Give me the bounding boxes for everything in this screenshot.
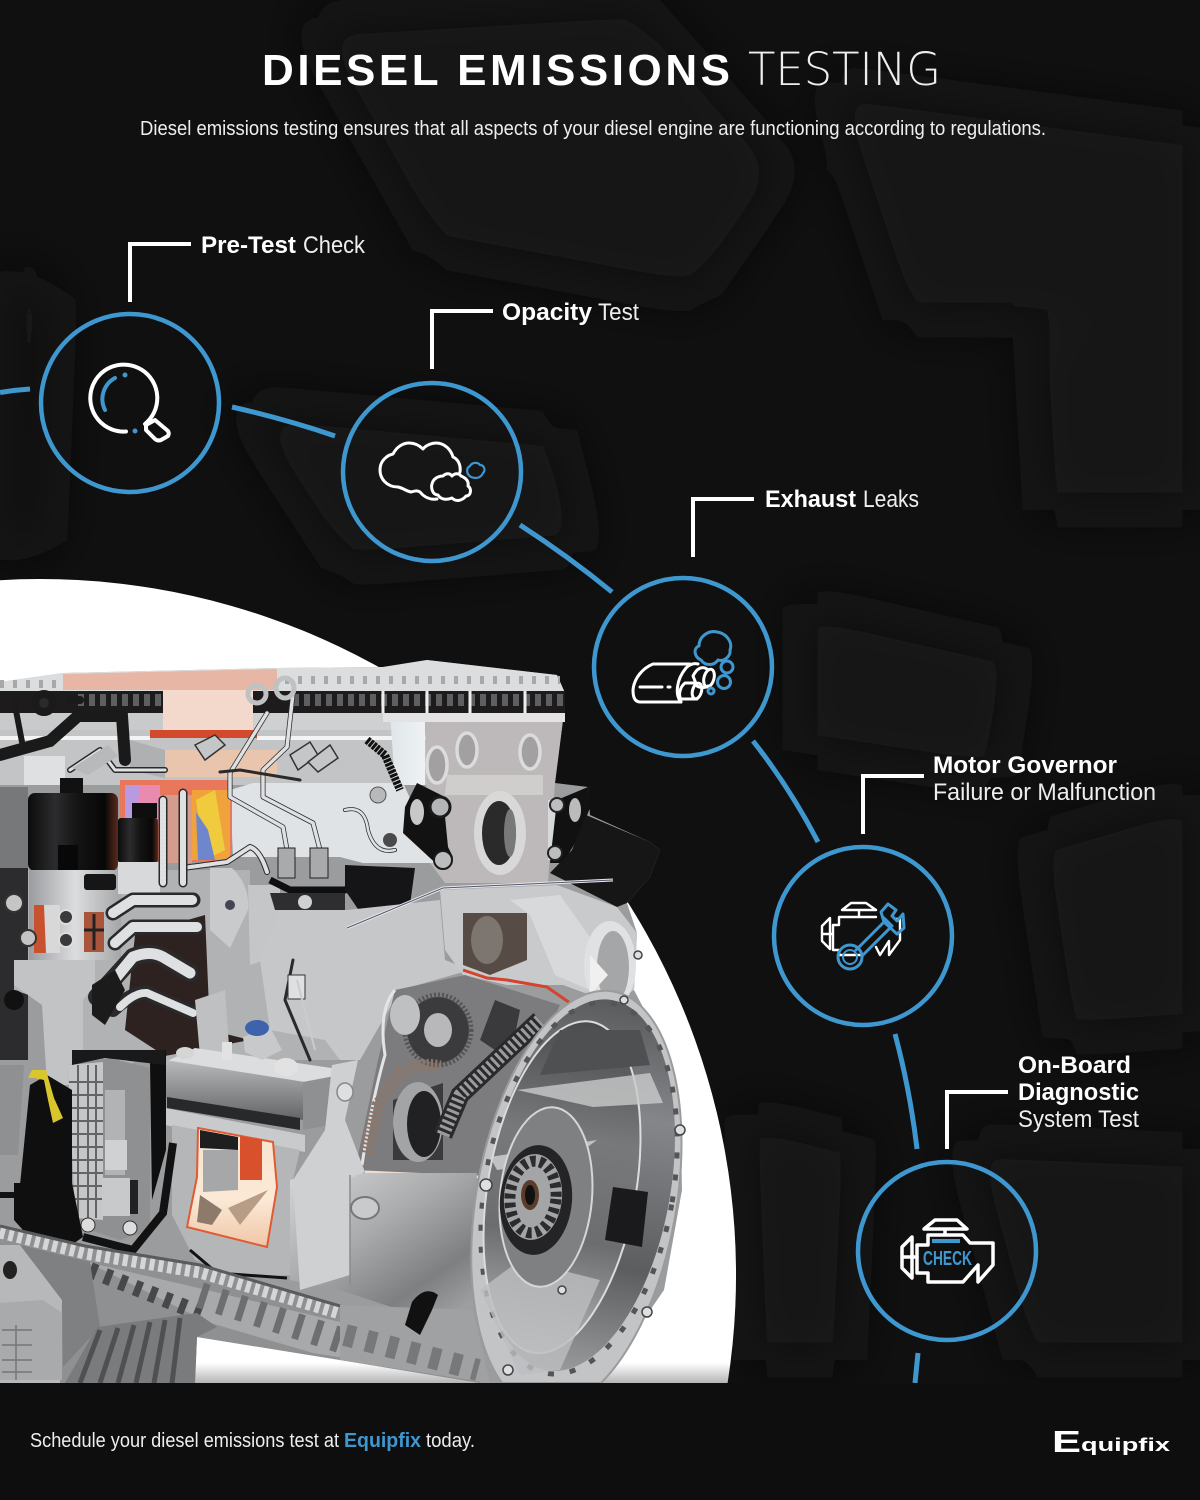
black hoses	[0, 694, 125, 760]
black brackets	[403, 783, 590, 870]
icon: engine with wrench	[822, 903, 904, 969]
yellow bracket	[28, 1070, 63, 1123]
left lower silver section	[0, 1065, 24, 1155]
lower filter stem	[14, 960, 95, 1085]
leader bracket	[130, 244, 191, 302]
label: System Test	[1018, 1106, 1139, 1133]
chrome fittings top	[70, 735, 338, 775]
left of head: bright casting	[230, 783, 440, 863]
leader bracket	[432, 311, 493, 369]
bolts	[480, 951, 685, 1375]
bell housing body	[290, 1060, 477, 1310]
flywheel rim	[471, 991, 682, 1383]
white backdrop circle	[0, 579, 736, 1383]
label: Exhaust	[765, 486, 856, 513]
footer band	[0, 1383, 1200, 1500]
label	[1018, 1052, 1139, 1133]
logo: Equipfix: quipfix	[1081, 1435, 1170, 1455]
knotted wire	[367, 740, 400, 790]
label: Leaks	[863, 486, 919, 513]
oil filter	[4, 778, 121, 1010]
step: On-Board Diagnostic	[858, 1052, 1139, 1340]
second filter	[118, 803, 160, 894]
stainless injector lines	[163, 678, 320, 883]
pump elbow	[195, 868, 280, 1060]
ring	[41, 314, 219, 492]
dark left block	[0, 787, 28, 1060]
ECU module	[68, 1058, 150, 1240]
icon: exhaust muffler	[633, 632, 733, 702]
title: DIESEL EMISSIONS	[262, 46, 730, 95]
flexible hoses	[92, 900, 197, 1025]
label: Test	[598, 299, 639, 326]
orange cutaway	[187, 1128, 277, 1247]
coloured cutaway window	[120, 780, 232, 863]
logo: Equipfix: E	[1052, 1424, 1081, 1459]
sensor	[405, 1291, 438, 1335]
step: Motor Governor	[774, 752, 1156, 1025]
leader bracket	[947, 1092, 1008, 1149]
label: On-Board	[1018, 1052, 1131, 1079]
label: Check	[303, 232, 366, 259]
intake elbow	[550, 815, 660, 907]
call to action: today.	[426, 1430, 475, 1452]
upper manifold silver band	[0, 730, 430, 785]
leader bracket	[863, 776, 924, 834]
housing around cutaway	[172, 1125, 300, 1277]
timing cover upper	[440, 885, 637, 1015]
icon: check engine	[902, 1220, 993, 1282]
label	[765, 486, 919, 513]
title: TESTING	[748, 43, 941, 96]
dark recess between hoses	[125, 915, 250, 1056]
label: Motor Governor	[933, 752, 1117, 779]
engine photo illustration	[0, 660, 705, 1390]
label: Diagnostic	[1018, 1079, 1139, 1106]
mid casting	[260, 900, 470, 1060]
black patch	[605, 1187, 648, 1247]
label	[933, 752, 1156, 806]
title	[262, 43, 941, 96]
ring	[343, 383, 521, 561]
icon: clouds	[380, 443, 484, 500]
step: Exhaust Leaks	[594, 486, 919, 756]
flywheel	[454, 951, 705, 1390]
hub disc	[492, 1103, 600, 1291]
black cables	[0, 1143, 287, 1278]
ring	[774, 847, 952, 1025]
logo: Equipfix	[1052, 1424, 1170, 1459]
call to action: Equipfix	[344, 1430, 421, 1452]
cylinder head block	[383, 713, 565, 883]
step: Pre-Test Check	[41, 232, 366, 492]
compressor block	[165, 980, 345, 1152]
label	[201, 232, 366, 259]
icon: check engine: CHECK	[923, 1248, 972, 1270]
connector arc segments	[0, 389, 918, 1383]
chrome fitting mid	[285, 960, 310, 1060]
injector nozzles and fuel rail	[270, 848, 415, 912]
label: Opacity	[502, 299, 593, 326]
valve cover top	[0, 660, 565, 730]
label: Failure or Malfunction	[933, 779, 1156, 806]
call to action: Schedule your diesel emissions test at	[30, 1430, 339, 1452]
ring	[594, 578, 772, 756]
dark lower-left hose block	[14, 1050, 166, 1246]
oil pan rail	[0, 1225, 490, 1383]
transparent gear cover	[355, 975, 560, 1180]
injection pipes right	[345, 787, 397, 851]
main engine body left	[14, 870, 345, 1085]
reflection streaks	[480, 1030, 663, 1375]
icon: magnifier	[90, 365, 169, 440]
label: Pre-Test	[201, 232, 296, 259]
ring	[858, 1162, 1036, 1340]
oil pan	[0, 1245, 217, 1383]
leader bracket	[693, 499, 754, 557]
label	[502, 299, 639, 326]
subtitle: Diesel emissions testing ensures that all aspects of your diesel engine are functioning according to regulations.	[140, 118, 1046, 140]
engine silhouette	[0, 660, 682, 1383]
step: Opacity Test	[343, 299, 639, 561]
